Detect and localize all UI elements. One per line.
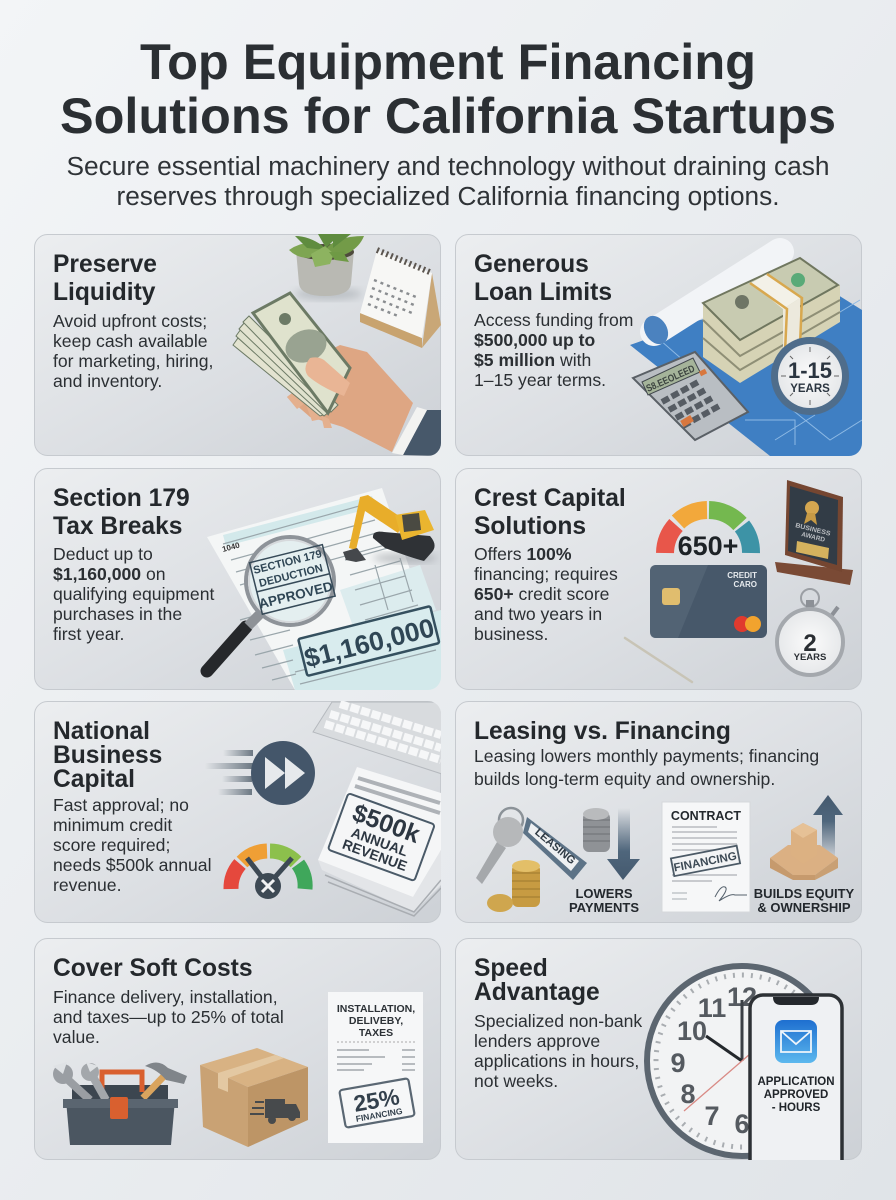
- text: preserve liquidity: and inventory.: [53, 371, 162, 391]
- text: cover soft costs: value.: [53, 1027, 100, 1047]
- text: crest capital solutions: Offers 100%: [474, 544, 572, 564]
- heading: leasing vs financing: Leasing vs. Financing: [474, 718, 731, 745]
- heading: generous loan limits: Loan Limits: [474, 279, 612, 306]
- title: Top Equipment Financing: [140, 34, 756, 90]
- heading: crest capital solutions: Crest Capital: [474, 485, 626, 512]
- text: section 179 tax breaks: [53, 544, 214, 644]
- tax form: [207, 488, 441, 690]
- text: leasing vs financing: [474, 746, 819, 789]
- icon: stack of papers with $500k label: [318, 767, 441, 916]
- subtitle: [66, 153, 830, 211]
- heading: generous loan limits: [474, 251, 612, 306]
- heading: national business capital: [53, 718, 162, 793]
- icon: award plaque: [775, 480, 853, 585]
- icon: smartphone approved: APPROVED: [764, 1089, 828, 1101]
- panel: section 179 tax breaks: [34, 468, 441, 690]
- heading: speed advantage: Advantage: [474, 979, 600, 1006]
- icon: wall clock: [647, 966, 837, 1156]
- illustration: blueprint, cash stack, calculator: [630, 252, 862, 456]
- icon: wall clock: 8: [680, 1079, 696, 1109]
- icon: receipt with 25% financing stamp: [328, 992, 423, 1143]
- text: crest capital solutions: and two years in: [474, 604, 602, 624]
- text: crest capital solutions: financing; requires: [474, 564, 618, 584]
- heading: preserve liquidity: [53, 251, 157, 306]
- arrow: builds equity up: [813, 795, 843, 860]
- blueprint sheet: [630, 290, 862, 456]
- icon: wall clock: 11: [698, 993, 726, 1023]
- icon: receipt with 25% financing stamp: INSTALLATION,: [337, 1003, 415, 1015]
- icon: keyboard: [313, 702, 445, 775]
- stamp: $1,160,000: $1,160,000: [301, 612, 437, 674]
- icon: stopwatch 2 years: [777, 589, 843, 675]
- text: national business capital: [53, 795, 211, 895]
- icon: credit score gauge 650+: [665, 510, 751, 561]
- icon: wall clock: 9: [670, 1048, 686, 1078]
- heading: national business capital: Business: [53, 742, 162, 769]
- panel: leasing vs financing: [456, 702, 862, 922]
- text: speed advantage: lenders approve: [474, 1031, 600, 1051]
- icon: silver coins: [583, 808, 610, 852]
- icon: receipt with 25% financing stamp: DELIVEBY,: [349, 1015, 403, 1027]
- heading: cover soft costs: Cover Soft Costs: [53, 955, 253, 982]
- title: [60, 34, 836, 144]
- text: section 179 tax breaks: purchases in the: [53, 604, 182, 624]
- label: lowers payments: [569, 886, 639, 915]
- text: cover soft costs: and taxes—up to 25% of total: [53, 1007, 284, 1027]
- icon: gold coins: [487, 860, 540, 912]
- panel: cover soft costs: [34, 938, 440, 1160]
- icon: stack of banknotes: [703, 258, 840, 383]
- icon: excavator: [343, 495, 437, 563]
- panel: national business capital: [34, 702, 445, 922]
- icon: receipt with 25% financing stamp: 25%: [352, 1083, 401, 1117]
- text: speed advantage: applications in hours,: [474, 1051, 639, 1071]
- text: leasing vs financing: Leasing lowers monthly payments; financing: [474, 746, 819, 766]
- icon: smartphone approved: [750, 995, 842, 1175]
- icon: delivery box: [200, 1048, 308, 1147]
- text: speed advantage: Specialized non-bank: [474, 1011, 642, 1031]
- text: generous loan limits: $500,000 up to: [474, 330, 596, 350]
- icon: credit score gauge 650+: 650+: [678, 531, 738, 561]
- illustration: tax form, magnifier, excavator: [207, 488, 441, 690]
- panel: preserve liquidity: [34, 234, 441, 456]
- text: generous loan limits: $5 million with: [474, 350, 591, 370]
- icon: magnifying glass: APPROVED: [257, 579, 335, 611]
- icon: clock 1-15 years: [771, 337, 849, 415]
- text: preserve liquidity: for marketing, hiring,: [53, 351, 213, 371]
- label: builds equity and ownership: [754, 886, 855, 915]
- text: speed advantage: not weeks.: [474, 1071, 558, 1091]
- icon: credit card: CARO: [733, 580, 757, 589]
- panel: crest capital solutions: [456, 468, 862, 690]
- text: generous loan limits: [474, 310, 633, 390]
- icon: key and leasing tag: LEASING: [532, 826, 578, 867]
- arrow: lowers payments down: [607, 808, 640, 880]
- text: generous loan limits: 1–15 year terms.: [474, 370, 606, 390]
- label: builds equity and ownership: & OWNERSHIP: [757, 900, 851, 915]
- icon: financing contract: [662, 802, 750, 912]
- icon: key and leasing tag: [476, 808, 587, 884]
- text: national business capital: minimum credit: [53, 815, 172, 835]
- icon: stack of papers with $500k label: $500k: [349, 799, 424, 849]
- illustration: cash in hand, plant, calendar: [233, 234, 441, 456]
- label: builds equity and ownership: BUILDS EQUITY: [754, 886, 855, 901]
- icon: fast-forward button: [205, 741, 315, 805]
- title: Solutions for California Startups: [60, 88, 836, 144]
- icon: wall clock: 6: [734, 1109, 750, 1139]
- icon: award plaque: BUSINESS: [795, 522, 832, 538]
- icon: stack of papers with $500k label: ANNUAL: [349, 824, 411, 860]
- text: section 179 tax breaks: Deduct up to: [53, 544, 153, 564]
- heading: speed advantage: [474, 955, 600, 1006]
- icon: wall clock: 10: [677, 1016, 707, 1046]
- icon: clock 1-15 years: 1-15: [788, 358, 832, 383]
- heading: generous loan limits: Generous: [474, 251, 589, 278]
- label: lowers payments: LOWERS: [575, 886, 633, 901]
- heading: section 179 tax breaks: Section 179: [53, 485, 190, 512]
- icon: receipt with 25% financing stamp: TAXES: [359, 1027, 393, 1039]
- icon: toolbox: [53, 1062, 187, 1145]
- heading: crest capital solutions: Solutions: [474, 513, 586, 540]
- icon: wall clock: 12: [727, 982, 757, 1012]
- icon: financing contract: FINANCING: [673, 850, 738, 874]
- icon: credit card: CREDIT: [727, 571, 757, 580]
- icon: credit card: [650, 565, 767, 638]
- illustration group: [205, 702, 445, 916]
- text: crest capital solutions: [474, 544, 618, 644]
- text: section 179 tax breaks: first year.: [53, 624, 124, 644]
- icon: magnifying glass: SECTION 179: [252, 548, 323, 577]
- icon: potted plant: [289, 234, 364, 300]
- icon: smartphone approved: - HOURS: [772, 1102, 821, 1114]
- text: national business capital: Fast approval; no: [53, 795, 189, 815]
- text: section 179 tax breaks: $1,160,000 on: [53, 564, 166, 584]
- icon: calculator: [633, 352, 748, 440]
- icon: stopwatch 2 years: YEARS: [794, 652, 826, 663]
- heading: preserve liquidity: Liquidity: [53, 279, 156, 306]
- icon: pen: [625, 638, 692, 682]
- icon: smartphone approved: APPLICATION: [757, 1076, 835, 1088]
- text: preserve liquidity: keep cash available: [53, 331, 208, 351]
- text: generous loan limits: Access funding from: [474, 310, 633, 330]
- text: preserve liquidity: [53, 311, 213, 391]
- subtitle: reserves through specialized California financing options.: [116, 183, 780, 211]
- icon: clock 1-15 years: YEARS: [790, 383, 830, 395]
- rolled blueprint: [639, 252, 780, 348]
- label: lowers payments: PAYMENTS: [569, 900, 639, 915]
- panel: speed advantage: [456, 938, 862, 1175]
- icon: brick blocks: [770, 823, 838, 880]
- icon: stack of papers with $500k label: REVENUE: [340, 836, 409, 874]
- icon: magnifying glass: DEDUCTION: [258, 562, 324, 590]
- text: leasing vs financing: builds long-term equity and ownership.: [474, 769, 775, 789]
- text: crest capital solutions: 650+ credit score: [474, 584, 609, 604]
- icon: wall clock: 7: [704, 1101, 720, 1131]
- icon: financing contract: CONTRACT: [671, 809, 741, 823]
- text: cover soft costs: [53, 987, 284, 1047]
- tax form: 1040: [221, 540, 241, 554]
- text: section 179 tax breaks: qualifying equipment: [53, 584, 214, 604]
- text: cover soft costs: Finance delivery, installation,: [53, 987, 278, 1007]
- heading: section 179 tax breaks: [53, 485, 190, 540]
- heading: preserve liquidity: Preserve: [53, 251, 157, 278]
- heading: section 179 tax breaks: Tax Breaks: [53, 513, 182, 540]
- panel: generous loan limits: [456, 234, 862, 456]
- icon: stopwatch 2 years: 2: [803, 630, 817, 657]
- heading: crest capital solutions: [474, 485, 626, 540]
- icon: desk calendar: [360, 250, 441, 348]
- icon: magnifying glass: [207, 537, 335, 671]
- subtitle: Secure essential machinery and technology without draining cash: [66, 153, 830, 181]
- heading: speed advantage: Speed: [474, 955, 548, 982]
- text: national business capital: needs $500k annual: [53, 855, 211, 875]
- text: national business capital: score required;: [53, 835, 170, 855]
- text: crest capital solutions: business.: [474, 624, 548, 644]
- text: preserve liquidity: Avoid upfront costs;: [53, 311, 207, 331]
- icon: award plaque: AWARD: [801, 531, 826, 544]
- icon: hand holding banknotes: [233, 293, 441, 456]
- text: speed advantage: [474, 1011, 642, 1091]
- icon: receipt with 25% financing stamp: FINANCING: [355, 1106, 404, 1124]
- heading: national business capital: Capital: [53, 766, 135, 793]
- heading: national business capital: National: [53, 718, 150, 745]
- icon: calculator: S8.EEOLEED: [645, 364, 697, 395]
- icon: credit gauge with X: [231, 851, 305, 899]
- text: national business capital: revenue.: [53, 875, 121, 895]
